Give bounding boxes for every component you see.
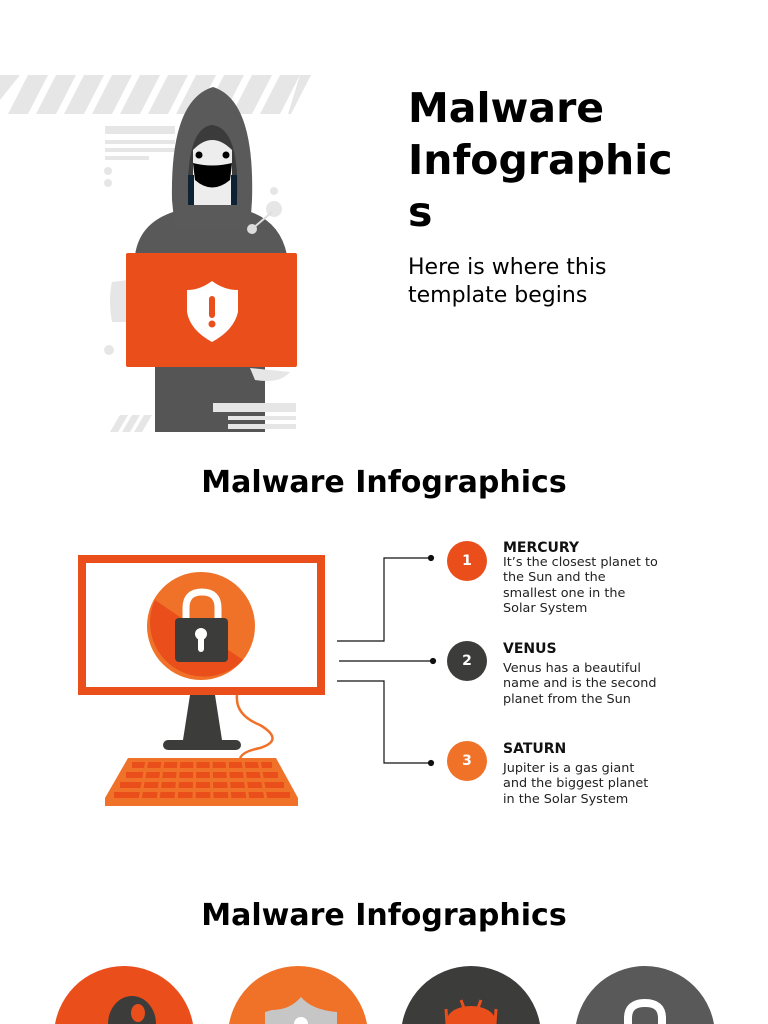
laptop shield: [126, 253, 297, 367]
badge 1: [447, 541, 487, 581]
text 1: It’s the closest planet to: [503, 555, 658, 570]
text 2: VENUS: [503, 641, 557, 657]
text 1: MERCURY: [503, 540, 579, 556]
text 3: SATURN: [503, 741, 566, 757]
title: Infographic: [408, 136, 673, 184]
text 2: [503, 641, 657, 707]
title: [408, 84, 673, 236]
computer illustration: [78, 554, 436, 806]
badge 3: 3: [462, 753, 472, 769]
text 2: name and is the second: [503, 676, 657, 691]
badge 2: [447, 641, 487, 681]
section heading 1: Malware Infographics: [201, 465, 567, 500]
item 2: [447, 641, 657, 707]
title: s: [408, 188, 432, 236]
connector lines: [337, 556, 436, 766]
badge 3: [447, 741, 487, 781]
subtitle: [408, 255, 606, 308]
text 3: Jupiter is a gas giant: [503, 761, 634, 776]
hacker: [110, 87, 296, 432]
icon circles row: [55, 966, 714, 1024]
badge 1: 1: [462, 553, 472, 569]
icon: shield: [228, 966, 368, 1024]
text 1: [503, 540, 658, 616]
hero illustration: [0, 75, 311, 432]
text 3: and the biggest planet: [503, 776, 648, 791]
monitor: [82, 559, 321, 691]
text 2: Venus has a beautiful: [503, 661, 641, 676]
text 2: planet from the Sun: [503, 692, 631, 707]
text 3: [502, 741, 648, 807]
item 1: [447, 540, 658, 616]
stand and keyboard: [105, 695, 298, 806]
subtitle: template begins: [408, 283, 587, 308]
badge 2: 2: [462, 653, 472, 669]
icon: user: [54, 966, 194, 1024]
text 1: the Sun and the: [503, 570, 606, 585]
subtitle: Here is where this: [408, 255, 606, 280]
title: Malware: [408, 84, 604, 132]
text 1: Solar System: [503, 601, 587, 616]
text 3: in the Solar System: [503, 792, 628, 807]
section heading 2: Malware Infographics: [201, 898, 567, 933]
icon: bug: [401, 966, 541, 1024]
icon: lock: [575, 966, 715, 1024]
text 1: smallest one in the: [503, 586, 625, 601]
item 3: [447, 741, 648, 807]
